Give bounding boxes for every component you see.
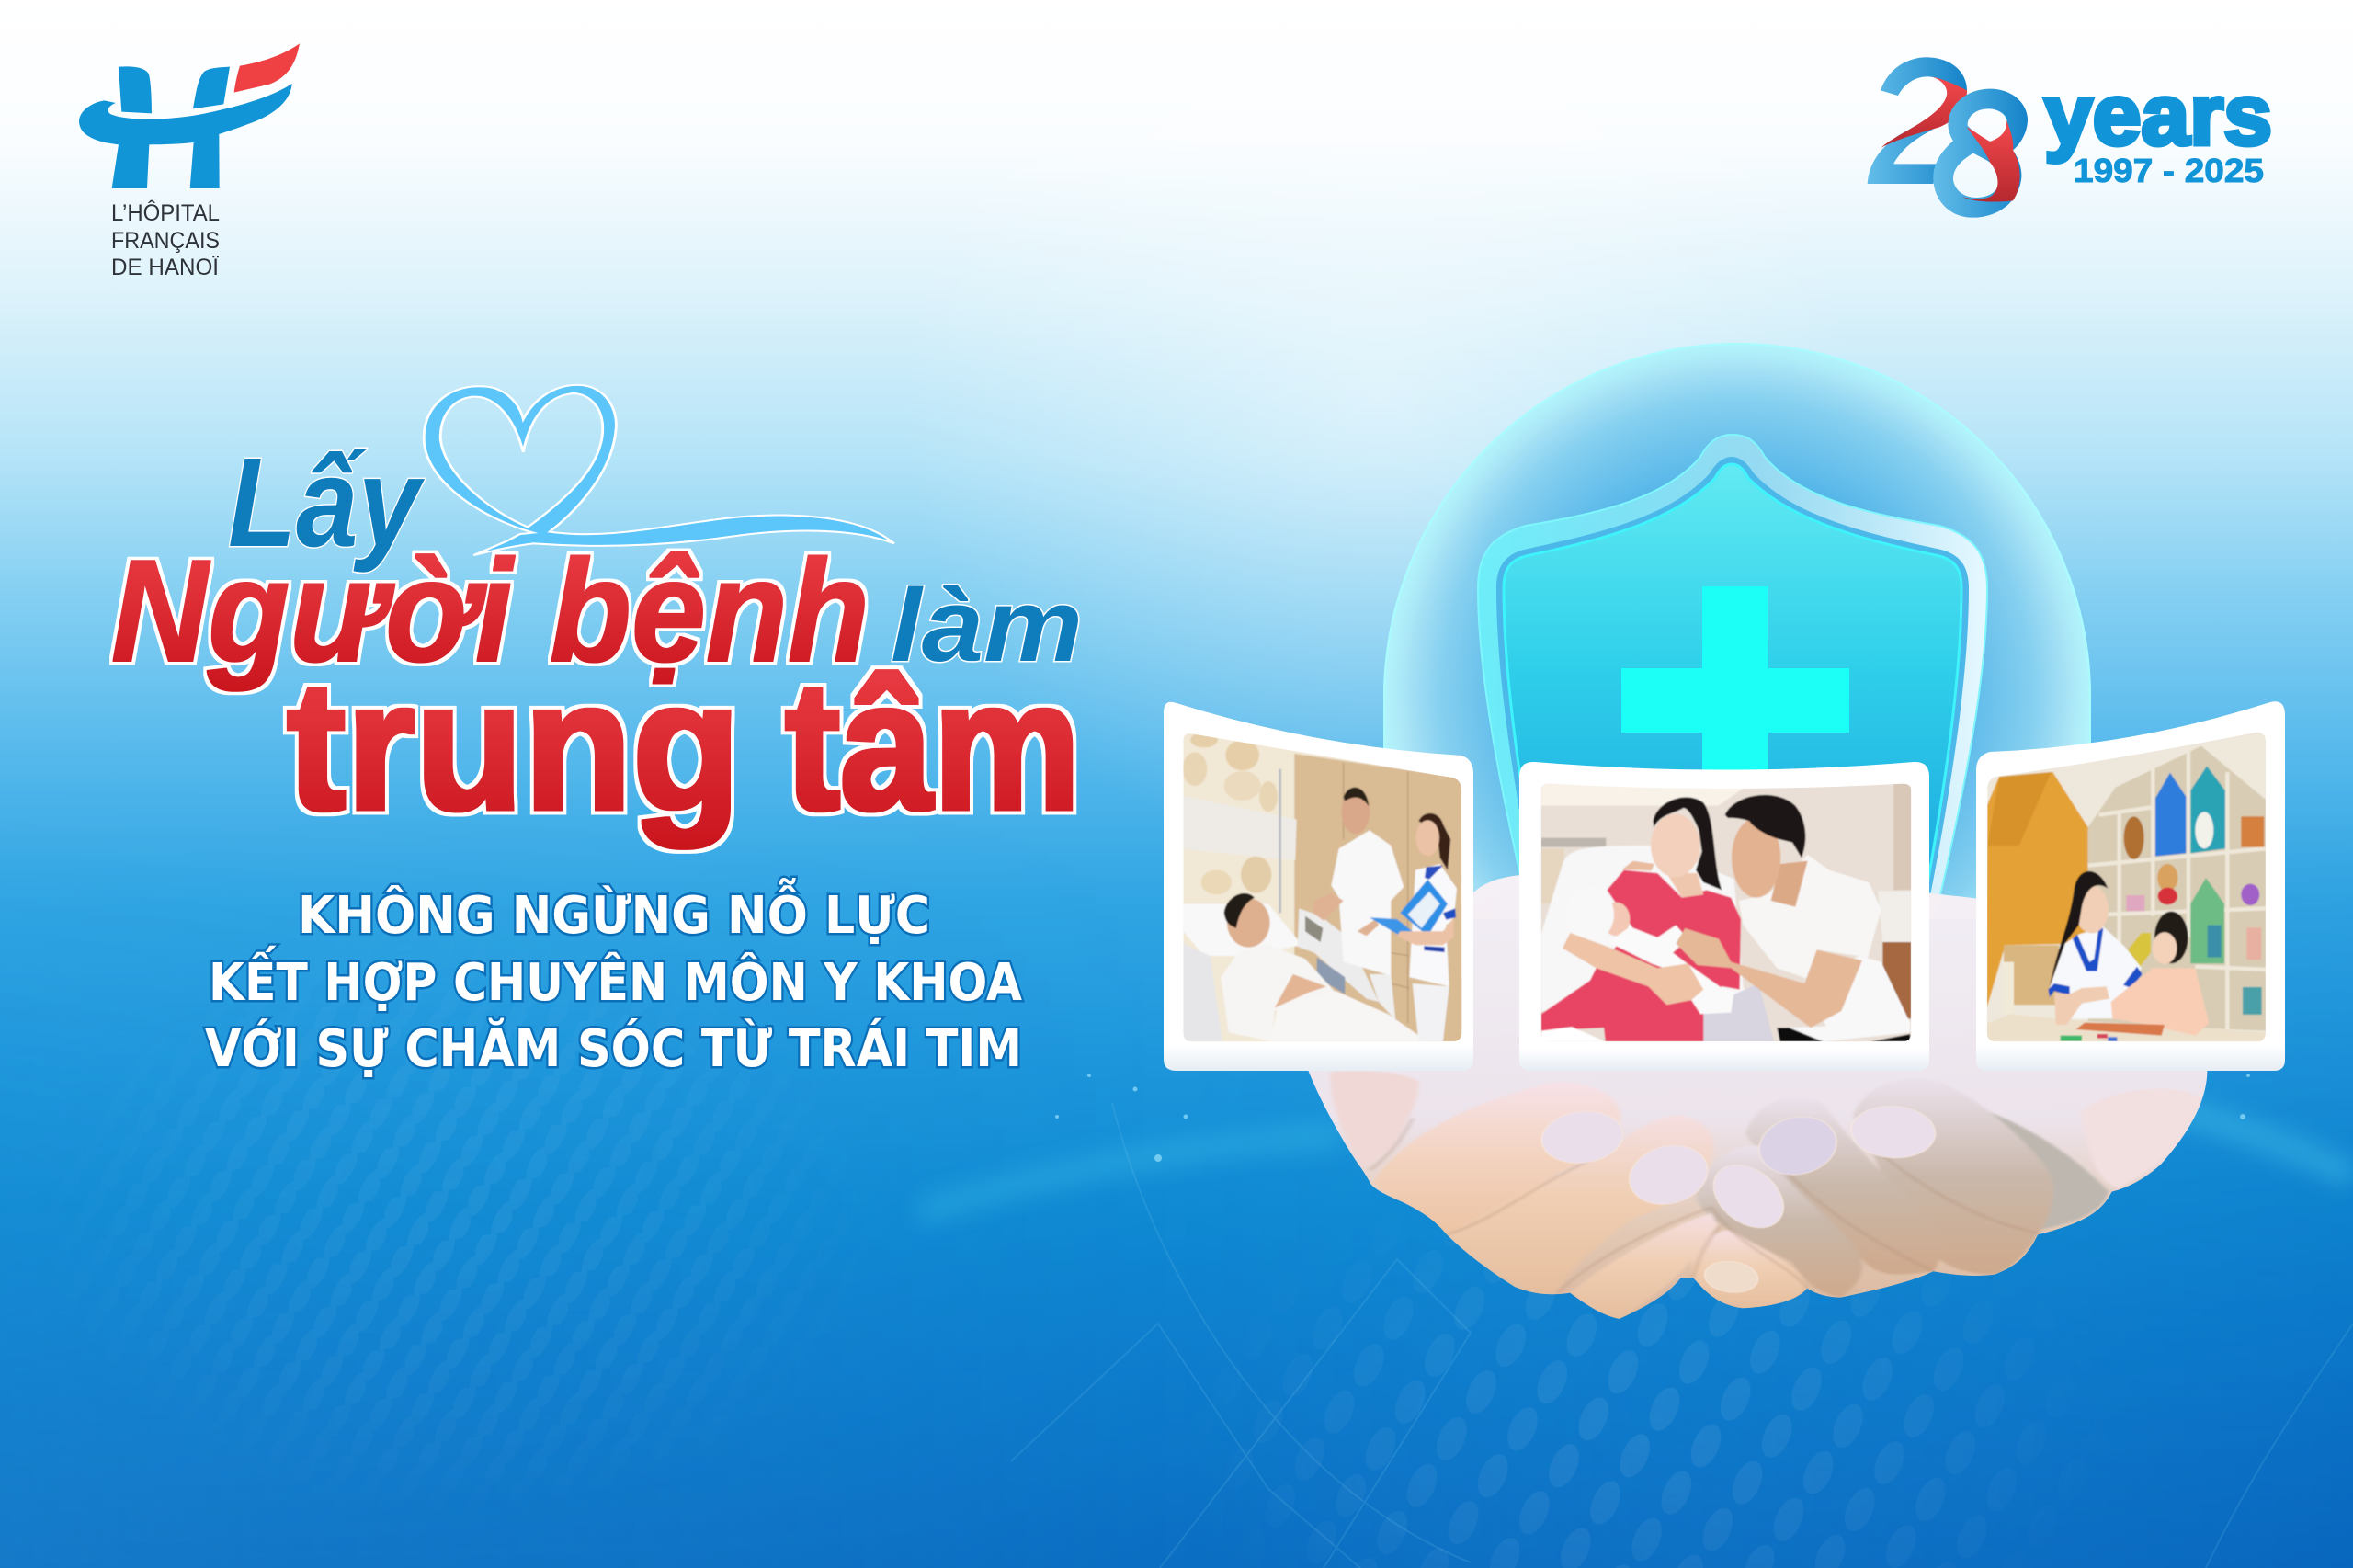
nails <box>1532 1103 1942 1296</box>
shield outer rim <box>1478 435 1987 919</box>
subtitle: KHÔNG NGỪNG NỖ LỰC <box>298 879 930 946</box>
logo wordmark: L’HÔPITAL <box>111 199 220 226</box>
title: trung: trung <box>287 643 741 848</box>
title: tâm: tâm <box>785 643 1081 848</box>
subtitle: KẾT HỢP CHUYÊN MÔN Y KHOA <box>209 946 1023 1013</box>
title: Lấy: Lấy <box>228 432 425 574</box>
logo mark <box>79 43 300 188</box>
shield inner face <box>1504 464 1961 919</box>
title block <box>111 385 1083 848</box>
finger creases <box>1370 1119 2038 1293</box>
photo <box>1540 781 1914 1045</box>
years range: 1997 - 2025 <box>2074 152 2264 189</box>
logo wordmark <box>111 199 220 280</box>
logo: L'Hôpital Français de Hanoï <box>79 43 300 280</box>
medical cross <box>1621 586 1849 827</box>
logo wordmark: DE HANOÏ <box>111 255 219 280</box>
photo card: doctor and patient <box>1164 702 1473 1071</box>
anniversary badge: 28 years <box>1868 57 2272 218</box>
photo card: nurse and child <box>1976 701 2285 1071</box>
hand silhouette <box>1308 873 2207 1319</box>
title: làm: làm <box>891 568 1083 683</box>
subtitle <box>205 879 1023 1079</box>
heart ribbon <box>424 385 894 555</box>
card frame <box>1976 701 2285 1071</box>
photo <box>1985 729 2268 1045</box>
card frame <box>1164 702 1473 1071</box>
fingers <box>1330 1071 2204 1319</box>
photo card: family with newborn <box>1519 762 1929 1071</box>
glowing dome <box>1383 343 2091 919</box>
word: years: years <box>2044 66 2272 163</box>
cupped hands <box>1308 873 2207 1319</box>
subtitle: VỚI SỰ CHĂM SÓC TỪ TRÁI TIM <box>205 1018 1022 1079</box>
numeral 28 <box>1868 57 2028 218</box>
title: Người bệnh: Người bệnh <box>111 530 870 692</box>
shield inner band <box>1496 457 1969 919</box>
logo wordmark: FRANÇAIS <box>111 228 220 254</box>
card frame <box>1519 762 1929 1071</box>
shield with cross <box>1478 435 1987 919</box>
photo <box>1183 729 1464 1045</box>
